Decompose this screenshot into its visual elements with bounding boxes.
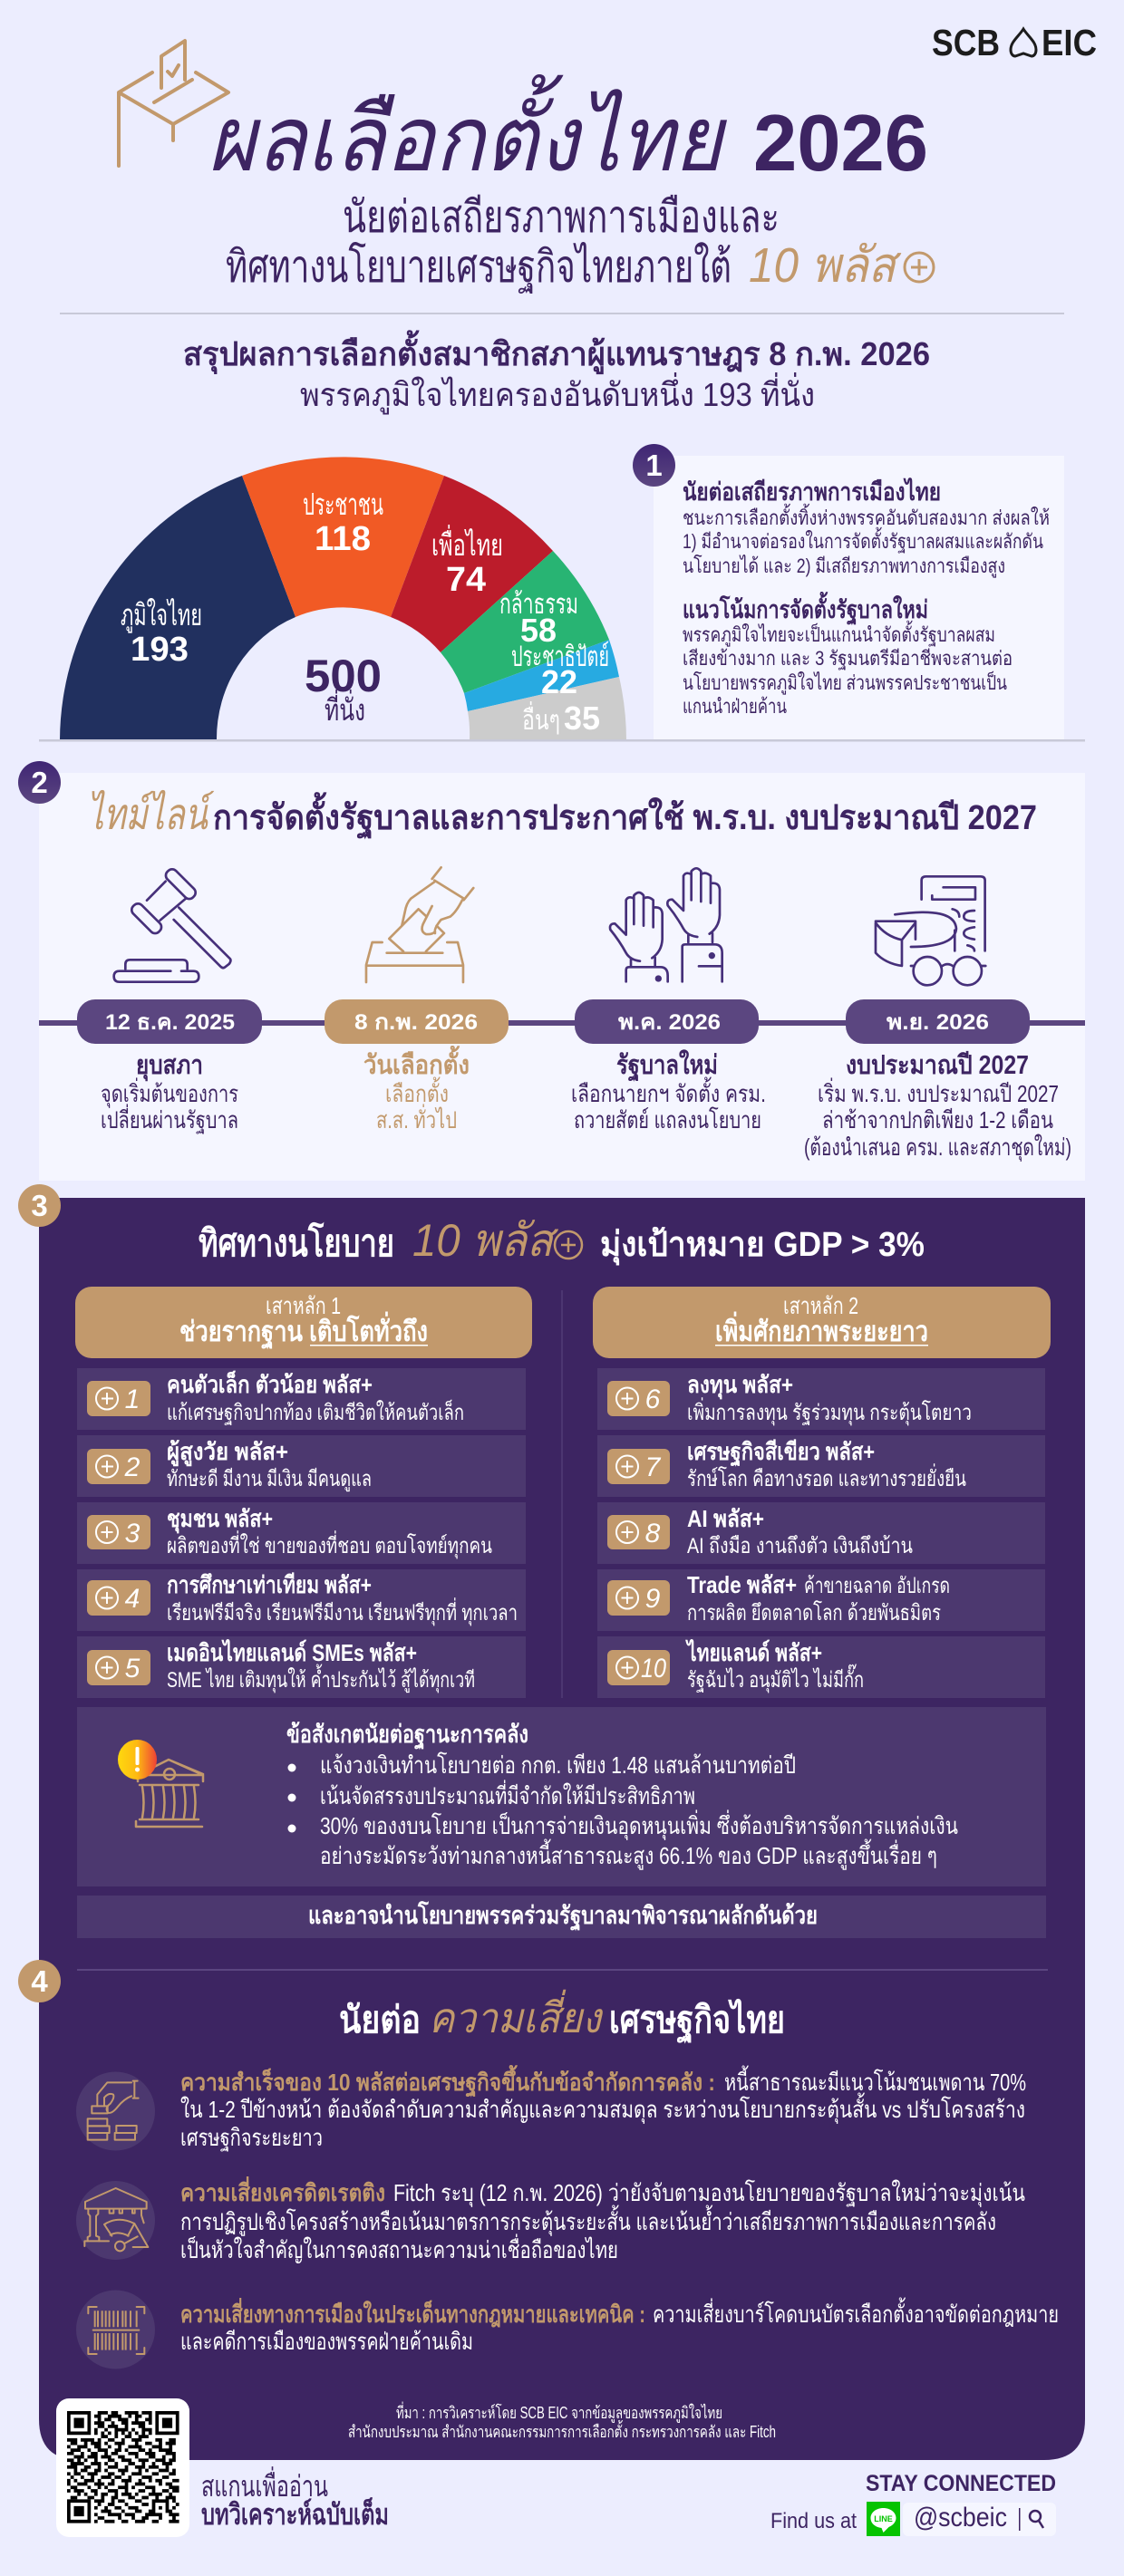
card: plus 5: 5	[125, 1654, 140, 1684]
risk 3 text	[180, 2297, 1059, 2355]
text block: new government trend: แกนนำฝ่ายค้าน	[683, 695, 787, 718]
panel 2: timeline	[18, 761, 1085, 1181]
risk heading: นัยต่อ	[339, 1999, 421, 2041]
logo: SCB EIC: SCB	[932, 22, 1000, 63]
badge 1: 1	[645, 449, 663, 482]
badge 4: 4	[31, 1964, 48, 1998]
risk 3 text: ความเสี่ยงทางการเมืองในประเด็นทางกฎหมายและเทคนิค :	[180, 2297, 645, 2328]
source note: สำนักงบประมาณ สำนักงานคณะกรรมการการเลือกตั้ง กระทรวงการคลัง และ Fitch	[348, 2420, 776, 2441]
card: plus 3: ผลิตของที่ใช่ ขายของที่ชอบ ตอบโจทย์ทุกคน	[167, 1530, 492, 1559]
fiscal note text: 30% ของงบนโยบาย เป็นการจ่ายเงินอุดหนุนเพิ่ม ซึ่งต้องบริหารจัดการแหล่งเงิน	[320, 1809, 958, 1840]
text block: new government trend: นโยบายพรรคภูมิใจไทย ส่วนพรรคประชาชนเป็น	[683, 670, 1007, 695]
social: stay connected: Find us at	[770, 2509, 857, 2533]
card: plus 3: 3	[125, 1519, 140, 1548]
step: new government: เลือกนายกฯ จัดตั้ง ครม.	[571, 1076, 766, 1107]
icon: budget documents and glasses	[876, 876, 985, 985]
card: plus 2: 2	[124, 1452, 140, 1482]
icon: LINE	[867, 2502, 900, 2536]
risk heading: เศรษฐกิจไทย	[609, 1998, 785, 2044]
timeline heading	[87, 789, 1037, 840]
pillar 2	[593, 1287, 1051, 1358]
title	[208, 74, 928, 190]
text block: stability: นัยต่อเสถียรภาพการเมืองไทย	[683, 478, 941, 506]
step: budget 2027: พ.ย. 2026	[887, 1010, 989, 1035]
card: plus 1: คนตัวเล็ก ตัวน้อย พลัส+	[167, 1370, 373, 1398]
step: new government: ถวายสัตย์ แถลงนโยบาย	[574, 1106, 761, 1134]
QR caption: บทวิเคราะห์ฉบับเต็ม	[201, 2496, 389, 2531]
subtitle	[226, 193, 934, 294]
text block: stability	[683, 478, 1050, 578]
panel 3: policy direction (dark)	[18, 1184, 1085, 2460]
step: new government: พ.ค. 2026	[618, 1010, 721, 1035]
card: plus 10: ไทยแลนด์ พลัส+	[685, 1638, 822, 1666]
risk 1: fiscal	[76, 2064, 1026, 2152]
chart: parliament half-donut: 74	[446, 561, 486, 599]
card: plus 8: AI ถึงมือ งานถึงตัว เงินถึงบ้าน	[687, 1534, 913, 1558]
card: plus 5: เมดอินไทยแลนด์ SMEs พลัส+	[167, 1638, 417, 1666]
chart: parliament half-donut: อื่นๆ	[522, 701, 560, 736]
card: plus 5: SME ไทย เติมทุนให้ ค้ำประกันไว้ สู้ได้ทุกเวที	[167, 1664, 475, 1693]
card: plus 1: แก้เศรษฐกิจปากท้อง เติมชีวิตให้คนตัวเล็ก	[167, 1399, 464, 1425]
logo: SCB EIC	[932, 22, 1097, 63]
icon: hand casting ballot	[366, 867, 473, 982]
risk 2 text: ความเสี่ยงเครดิตเรตติง	[180, 2176, 385, 2206]
card: plus 6	[597, 1368, 1045, 1430]
fiscal note panel	[77, 1707, 1046, 1886]
handle: @scbeic	[903, 2503, 1056, 2536]
icon: raised hands	[610, 868, 722, 981]
fiscal note text: อย่างระมัดระวังท่ามกลางหนี้สาธารณะสูง 66.1% ของ GDP และสูงขึ้นเรื่อย ๆ	[320, 1838, 937, 1870]
step: dissolution: เปลี่ยนผ่านรัฐบาล	[101, 1104, 238, 1134]
card: plus 7	[597, 1435, 1045, 1497]
chart: parliament half-donut: ภูมิใจไทย	[121, 598, 202, 633]
policy heading: ทิศทางนโยบาย	[199, 1221, 394, 1264]
card: plus 3: ชุมชน พลัส+	[167, 1505, 273, 1534]
step: budget 2027: ล่าช้าจากปกติเพียง 1-2 เดือน	[822, 1106, 1053, 1134]
card: plus 7: 7	[645, 1452, 662, 1482]
risk 2: credit rating	[76, 2176, 1025, 2263]
risk 1 text	[180, 2064, 1026, 2152]
text block: stability: ชนะการเลือกตั้งทิ้งห่างพรรคอันดับสองมาก ส่งผลให้	[683, 504, 1050, 529]
icon: barcode	[88, 2307, 144, 2354]
risk heading	[339, 1989, 785, 2044]
risk 3: barcode legal	[76, 2291, 1059, 2369]
card: plus 8: 8	[645, 1519, 661, 1548]
handle: @scbeic: @scbeic	[914, 2503, 1007, 2533]
card: plus 10: 10	[641, 1654, 666, 1684]
panel 1: political stability	[633, 444, 1064, 739]
chart: parliament half-donut: ที่นั่ง	[325, 690, 365, 727]
step: dissolution	[77, 999, 262, 1134]
icon: gavel	[114, 867, 230, 982]
badge 4	[18, 1960, 61, 2002]
coalition note bar: และอาจนำนโยบายพรรคร่วมรัฐบาลมาพิจารณาผลักดันด้วย	[308, 1900, 818, 1932]
fiscal note text: เน้นจัดสรรงบประมาณที่มีจำกัดให้มีประสิทธิภาพ	[320, 1780, 695, 1809]
risk 2 text	[180, 2176, 1025, 2263]
fiscal note text	[286, 1721, 958, 1870]
card: plus 2	[77, 1435, 526, 1497]
card: plus 10	[597, 1636, 1045, 1698]
timeline line	[39, 1020, 1085, 1026]
chart: parliament half-donut: 500	[305, 651, 382, 701]
fiscal note text: ข้อสังเกตนัยต่อฐานะการคลัง	[286, 1721, 528, 1751]
source note	[348, 2401, 776, 2441]
card: plus 6: 6	[645, 1384, 661, 1414]
step: budget 2027	[804, 999, 1071, 1162]
timeline heading: ไทม์ไลน์	[87, 789, 214, 839]
logo: SCB EIC: EIC	[1042, 22, 1097, 63]
step: election day: ส.ส. ทั่วไป	[376, 1104, 457, 1134]
pillar 1: ช่วยรากฐาน เติบโตทั่วถึง	[179, 1311, 428, 1350]
risk 1 text: เศรษฐกิจระยะยาว	[180, 2124, 323, 2152]
text block: new government trend	[683, 591, 1013, 718]
badge 3	[18, 1184, 61, 1227]
risk 2 text: เป็นหัวใจสำคัญในการคงสถานะความน่าเชื่อถือของไทย	[180, 2233, 618, 2263]
card: plus 9: Trade พลัส+	[687, 1571, 797, 1598]
step: election day	[325, 999, 509, 1134]
risk 1 text: หนี้สาธารณะมีแนวโน้มชนเพดาน 70%	[724, 2065, 1026, 2096]
card: plus 6: ลงทุน พลัส+	[687, 1371, 793, 1400]
card: plus 2: ทักษะดี มีงาน มีเงิน มีคนดูแล	[167, 1467, 372, 1492]
icon: hand with coins	[88, 2081, 139, 2140]
card: plus 1	[77, 1368, 526, 1430]
chart: parliament half-donut: 35	[564, 699, 600, 737]
card: plus 9: การผลิต ยึดตลาดโลก ด้วยพันธมิตร	[687, 1600, 941, 1626]
QR code	[56, 2398, 189, 2537]
social: stay connected: STAY CONNECTED	[866, 2471, 1056, 2496]
step: election day: เลือกตั้ง	[385, 1076, 449, 1107]
icon: bank with gauge	[84, 2188, 148, 2251]
card: plus 9: ค้าขายฉลาด อัปเกรด	[804, 1574, 950, 1598]
text block: new government trend: เสียงข้างมาก และ 3 รัฐมนตรีมีอาชีพจะสานต่อ	[683, 647, 1013, 671]
title: 2026	[753, 98, 928, 188]
chart: parliament half-donut: กล้าธรรม	[499, 588, 578, 620]
subtitle: นัยต่อเสถียรภาพการเมืองและ	[343, 193, 780, 242]
chart: parliament half-donut: เพื่อไทย	[431, 525, 503, 562]
step: budget 2027: เริ่ม พ.ร.บ. งบประมาณปี 2027	[818, 1077, 1059, 1107]
step: dissolution: 12 ธ.ค. 2025	[105, 1010, 235, 1035]
chart: parliament half-donut: 22	[541, 663, 577, 700]
card: plus 4: 4	[125, 1584, 140, 1614]
pillar 1	[75, 1287, 532, 1358]
policy heading: มุ่งเป้าหมาย GDP > 3%	[600, 1226, 925, 1266]
card: plus 6: เพิ่มการลงทุน รัฐร่วมทุน กระตุ้นโตยาว	[687, 1397, 972, 1426]
risk 1 text: ความสำเร็จของ 10 พลัสต่อเศรษฐกิจขึ้นกับข้อจำกัดการคลัง :	[180, 2064, 715, 2098]
timeline heading: การจัดตั้งรัฐบาลและการประกาศใช้ พ.ร.บ. งบประมาณปี 2027	[213, 792, 1037, 840]
source note: ที่มา : การวิเคราะห์โดย SCB EIC จากข้อมูลของพรรคภูมิใจไทย	[396, 2401, 722, 2423]
policy heading: 10 พลัส	[412, 1215, 558, 1266]
card: plus 4: เรียนฟรีมีจริง เรียนฟรีมีงาน เรียนฟรีทุกที่ ทุกเวลา	[167, 1597, 518, 1626]
step: dissolution: ยุบสภา	[136, 1051, 203, 1081]
text block: stability: 1) มีอำนาจต่อรองในการจัดตั้งรัฐบาลผสมและผลักดัน	[683, 527, 1043, 554]
risk 3 text: และคดีการเมืองของพรรคฝ่ายค้านเดิม	[180, 2328, 473, 2355]
badge 3: 3	[31, 1189, 48, 1222]
subtitle: 10 พลัส	[749, 238, 901, 293]
heading: election summary: สรุปผลการเลือกตั้งสมาชิกสภาผู้แทนราษฎร 8 ก.พ. 2026	[183, 330, 930, 375]
pillar 2: เพิ่มศักยภาพระยะยาว	[715, 1311, 928, 1347]
icon: bank with warning	[118, 1740, 203, 1827]
step: budget 2027: งบประมาณปี 2027	[846, 1051, 1029, 1080]
chart: parliament half-donut: 118	[315, 520, 371, 558]
badge 2	[18, 761, 61, 804]
step: new government: รัฐบาลใหม่	[616, 1049, 718, 1082]
step: election day: วันเลือกตั้ง	[363, 1045, 470, 1080]
heading: election summary: พรรคภูมิใจไทยครองอันดับหนึ่ง 193 ที่นั่ง	[300, 372, 815, 415]
card: plus 8	[597, 1502, 1045, 1564]
pillar 2: เสาหลัก 2	[783, 1292, 858, 1319]
title: ผลเลือกตั้งไทย	[208, 74, 728, 190]
QR caption: สแกนเพื่ออ่าน	[201, 2466, 328, 2503]
chart: parliament half-donut: ประชาธิปัตย์	[511, 641, 609, 672]
chart: parliament half-donut: 58	[520, 612, 557, 649]
card: plus 4: การศึกษาเท่าเทียม พลัส+	[167, 1571, 372, 1598]
step: election day: 8 ก.พ. 2026	[354, 1010, 478, 1035]
card: plus 8: AI พลัส+	[687, 1505, 764, 1532]
card: plus 9	[597, 1569, 1045, 1631]
icon: LINE: LINE	[874, 2514, 893, 2523]
text block: new government trend: แนวโน้มการจัดตั้งรัฐบาลใหม่	[683, 591, 928, 626]
social: stay connected	[770, 2471, 1056, 2536]
QR caption	[201, 2466, 389, 2531]
card: plus 1: 1	[125, 1384, 140, 1414]
card: plus 10: รัฐฉับไว อนุมัติไว ไม่มีกั๊ก	[687, 1664, 864, 1693]
step: new government	[571, 999, 766, 1134]
badge 2: 2	[31, 766, 48, 799]
policy heading	[199, 1215, 925, 1266]
risk heading: ความเสี่ยง	[429, 1989, 604, 2041]
card: plus 9: 9	[645, 1584, 661, 1614]
chart: parliament half-donut: ประชาชน	[303, 487, 383, 521]
card: plus 4	[77, 1569, 526, 1631]
text block: stability: นโยบายได้ และ 2) มีเสถียรภาพทางการเมืองสูง	[683, 555, 1005, 578]
heading: election summary	[183, 330, 930, 415]
card: plus 2: ผู้สูงวัย พลัส+	[167, 1438, 288, 1467]
chart: parliament half-donut: 193	[131, 631, 189, 669]
card: plus 5	[77, 1636, 526, 1698]
text block: new government trend: พรรคภูมิใจไทยจะเป็นแกนนำจัดตั้งรัฐบาลผสม	[683, 621, 995, 647]
fiscal note text: แจ้งวงเงินทำนโยบายต่อ กกต. เพียง 1.48 แสนล้านบาทต่อปี	[320, 1751, 796, 1779]
subtitle: ทิศทางนโยบายเศรษฐกิจไทยภายใต้	[226, 241, 732, 294]
pillar 1: เสาหลัก 1	[266, 1292, 341, 1319]
badge 1	[633, 444, 675, 487]
coalition note bar	[77, 1896, 1046, 1938]
card: plus 7: เศรษฐกิจสีเขียว พลัส+	[687, 1438, 875, 1468]
icon: ballot box	[119, 41, 228, 166]
chart: parliament half-donut	[60, 457, 626, 740]
step: dissolution: จุดเริ่มต้นของการ	[101, 1077, 238, 1108]
card: plus 3	[77, 1502, 526, 1564]
card: plus 7: รักษ์โลก คือทางรอด และทางรวยยั่งยืน	[687, 1463, 966, 1491]
